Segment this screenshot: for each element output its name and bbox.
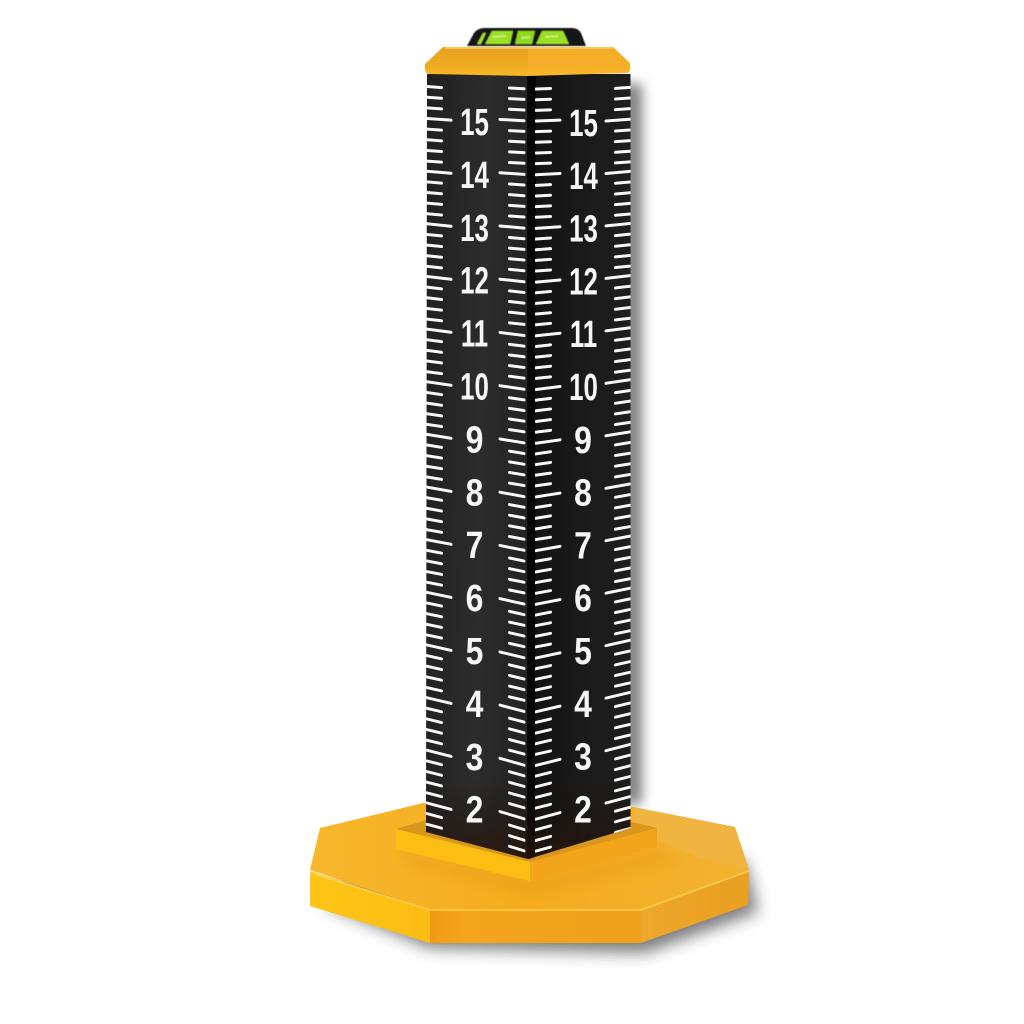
octagonal base <box>310 803 749 943</box>
base back-right lighter facet <box>632 807 749 870</box>
right face numbers: 11 <box>570 313 597 355</box>
left face numbers: 9 <box>466 419 483 461</box>
left face numbers: 14 <box>460 154 489 196</box>
right face numbers <box>569 102 598 831</box>
level window right <box>536 31 569 44</box>
right face numbers: 8 <box>574 472 592 514</box>
yellow top cap <box>425 47 630 76</box>
right face inner ticks <box>536 89 560 862</box>
right face numbers: 10 <box>569 366 598 408</box>
left face numbers: 5 <box>466 630 483 673</box>
left face numbers: 15 <box>460 101 489 143</box>
right face numbers: 14 <box>569 155 598 197</box>
left face numbers <box>460 101 489 831</box>
column cast shadow <box>622 84 642 804</box>
right face numbers: 15 <box>569 102 598 144</box>
right face numbers: 12 <box>569 260 598 303</box>
right face numbers: 7 <box>574 525 592 567</box>
left face numbers: 3 <box>466 736 483 778</box>
bubble level on top <box>467 28 586 46</box>
plinth right side <box>530 828 657 881</box>
centre edge <box>527 74 536 859</box>
warm reflection at column foot <box>426 780 630 859</box>
level housing <box>467 28 586 46</box>
left face inner ticks <box>500 88 524 861</box>
level window centre <box>515 31 535 44</box>
level window left <box>485 31 513 44</box>
base left side <box>310 871 430 943</box>
left face numbers: 7 <box>466 525 483 567</box>
right face outer ticks <box>606 87 630 846</box>
left face numbers: 2 <box>466 789 483 831</box>
measuring column <box>426 74 630 862</box>
left face numbers: 10 <box>460 366 489 408</box>
left face <box>426 74 528 859</box>
plinth shadow on base <box>396 847 680 896</box>
cap right half <box>528 47 630 76</box>
right face numbers: 9 <box>574 419 592 461</box>
base edge highlights <box>310 871 749 910</box>
cap left half <box>425 47 528 76</box>
right face numbers: 4 <box>574 683 592 725</box>
base top face <box>310 803 749 910</box>
base front side <box>430 910 641 943</box>
right face numbers: 13 <box>569 208 598 250</box>
plinth under column <box>396 820 680 896</box>
right face numbers: 6 <box>574 578 592 620</box>
left face numbers: 4 <box>466 683 484 726</box>
right face <box>528 74 630 859</box>
right face numbers: 3 <box>574 736 592 778</box>
plinth top <box>396 820 657 862</box>
cap top highlight <box>445 47 612 49</box>
right face numbers: 2 <box>574 789 592 831</box>
left face numbers: 13 <box>460 207 489 249</box>
left face numbers: 6 <box>466 578 483 620</box>
left face numbers: 12 <box>460 260 489 302</box>
level small left window <box>477 33 486 44</box>
plinth left side <box>396 829 530 881</box>
level glare <box>492 36 558 38</box>
left face numbers: 8 <box>466 472 483 514</box>
right face numbers: 5 <box>574 630 592 673</box>
base right side <box>641 871 749 943</box>
left face numbers: 11 <box>461 313 488 355</box>
left face outer ticks <box>427 87 451 852</box>
base drop shadow <box>325 860 758 953</box>
